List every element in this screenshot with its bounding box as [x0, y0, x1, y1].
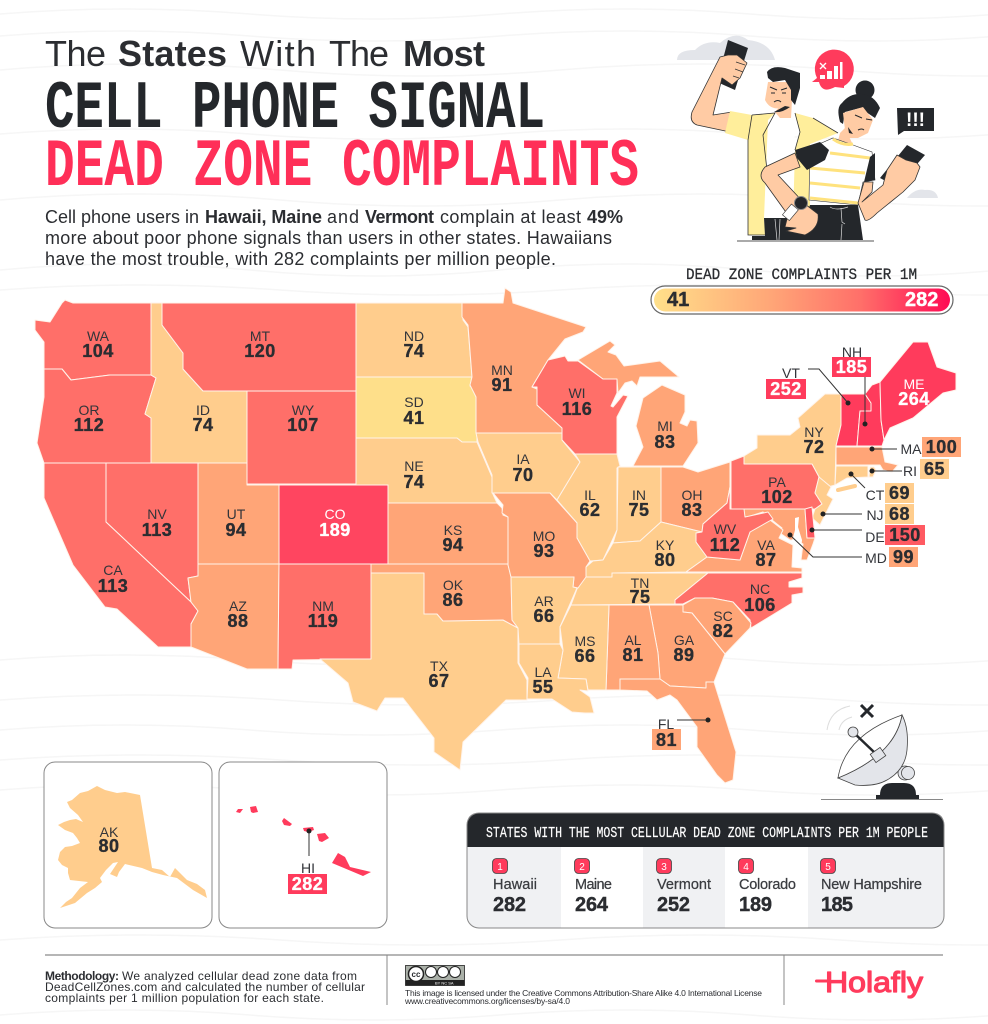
- state: NM: 119: [308, 611, 338, 631]
- state: CO: 189: [319, 520, 351, 540]
- state: AL: [606, 605, 660, 690]
- state: AR: AR: [534, 593, 554, 609]
- state: PA: PA: [768, 474, 786, 490]
- state: WA: [35, 300, 151, 380]
- state: UT: UT: [227, 506, 246, 522]
- title: [45, 33, 639, 206]
- state: CA: CA: [103, 562, 123, 578]
- state: NE: 74: [403, 472, 425, 492]
- callout: MD: [788, 532, 918, 567]
- callout: NH: NH: [842, 344, 862, 360]
- state: NE: [356, 438, 497, 503]
- state: SC: 82: [712, 621, 734, 641]
- callout: DE: 150: [889, 525, 921, 545]
- callout: FL: FL: [658, 716, 674, 732]
- state: MO: [493, 493, 590, 588]
- panel: Alaska inset: 80: [98, 836, 120, 856]
- callout: RI: RI: [903, 463, 917, 479]
- state: WI: 116: [562, 399, 592, 419]
- state: NC: NC: [750, 581, 770, 597]
- state: MS: [558, 605, 609, 690]
- state: FL: [620, 679, 736, 783]
- state: DE: [805, 507, 815, 538]
- state: WY: [247, 391, 356, 484]
- license text: This image is licensed under the Creative Commons Attribution-Share Alike 4.0 International License: [405, 988, 762, 998]
- state: PA: [731, 456, 822, 509]
- state: WV: 112: [710, 535, 740, 555]
- rank 1: Hawaii: 1: [497, 862, 503, 873]
- state: WY: 107: [287, 415, 319, 435]
- state: ID: 74: [192, 415, 214, 435]
- state: LA: LA: [534, 664, 552, 680]
- state: TN: TN: [631, 575, 649, 591]
- panel: Hawaii inset: [219, 762, 387, 928]
- state: NC: [675, 573, 803, 628]
- panel: Alaska inset: AK: [100, 824, 119, 840]
- rank 4: Colorado: [738, 858, 796, 916]
- rank 2: Maine: Maine: [575, 877, 612, 893]
- panel: Hawaii inset: HI: [301, 860, 315, 876]
- state: MI: [578, 341, 698, 466]
- state: SC: [683, 598, 751, 654]
- state: VA: [686, 520, 802, 572]
- callout: CT: CT: [866, 487, 885, 503]
- license text: www.creativecommons.org/licenses/by-sa/4.0: [404, 996, 570, 1006]
- state: OH: 83: [681, 500, 703, 520]
- state: NH: [857, 382, 884, 446]
- state: MI: MI: [657, 418, 673, 434]
- state: KS: [388, 503, 508, 564]
- state: MN: 91: [491, 375, 513, 395]
- callout: NJ: [820, 504, 914, 524]
- state: OR: 112: [74, 415, 104, 435]
- state: MT: [162, 303, 356, 391]
- icon: exclamation speech bubble: !!!: [906, 110, 925, 131]
- legend: complaints colour scale: 41: [667, 289, 689, 311]
- state: ME: 264: [898, 389, 930, 409]
- state: KY: 80: [654, 550, 676, 570]
- icon: clouds: [677, 36, 938, 198]
- methodology note: [45, 969, 365, 1005]
- state: MD: [744, 509, 815, 560]
- panel: top five states table: [467, 813, 944, 928]
- state: MT: MT: [250, 328, 271, 344]
- state: TN: 75: [629, 587, 651, 607]
- rank 4: Colorado: Colorado: [739, 877, 796, 893]
- rank 3: Vermont: Vermont: [657, 877, 711, 893]
- state: IA: 70: [512, 465, 534, 485]
- table header: [467, 813, 944, 847]
- state: VA: 87: [755, 550, 777, 570]
- callout: MA: 100: [926, 437, 957, 457]
- illustration: frustrated phone users: [677, 36, 938, 241]
- icon: no signal speech bubble: [812, 50, 854, 90]
- state: TX: 67: [428, 671, 450, 691]
- state: GA: 89: [673, 645, 695, 665]
- rank 3: Vermont: 252: [657, 894, 690, 916]
- rank 2: Maine: [574, 858, 612, 916]
- callout: RI: [870, 459, 949, 479]
- state: UT: [198, 463, 279, 564]
- callout: NH: [832, 344, 871, 426]
- state: SD: [356, 377, 477, 442]
- state: WI: WI: [568, 385, 586, 401]
- rank 3: Vermont: [656, 858, 711, 916]
- state: Long Island (NY): [838, 486, 855, 490]
- state: IN: [613, 467, 661, 543]
- rank 1: Hawaii: [492, 858, 537, 916]
- state: AZ: AZ: [229, 598, 247, 614]
- state: TX: TX: [430, 658, 449, 674]
- callout: CT: 69: [889, 483, 910, 503]
- state: NY: [744, 394, 841, 487]
- state: CO: CO: [324, 506, 346, 522]
- intro paragraph: Vermont: [365, 207, 434, 227]
- callout: VT: [766, 365, 850, 406]
- state: IL: [557, 454, 620, 561]
- state: PA: 102: [761, 487, 793, 507]
- state: AZ: [188, 564, 279, 669]
- state: WI: [532, 356, 628, 454]
- state: SC: SC: [713, 608, 733, 624]
- state: NJ: [812, 477, 833, 525]
- intro paragraph: Hawaii, Maine: [205, 207, 322, 227]
- map: contiguous US choropleth: [35, 288, 956, 783]
- Holafly logo: Holafly: [825, 967, 924, 999]
- icon: satellite dish: [821, 705, 943, 800]
- state: TX: [320, 573, 527, 770]
- legend: complaints colour scale: [651, 266, 953, 314]
- state: CO: [279, 485, 388, 564]
- state: ID: ID: [196, 402, 210, 418]
- icon: creative commons badge: [406, 966, 464, 986]
- intro paragraph: more about poor phone signals than users in other states. Hawaiians: [45, 228, 612, 248]
- state: LA: 55: [532, 677, 554, 697]
- state: KS: 94: [442, 535, 464, 555]
- state: NV: 113: [142, 520, 172, 540]
- state: AZ: 88: [227, 611, 249, 631]
- state: CA: [44, 463, 198, 647]
- icon: creative commons badge: cc: [412, 970, 421, 979]
- state: MO: 93: [533, 541, 555, 561]
- intro paragraph: and: [327, 207, 359, 227]
- title: Most: [403, 33, 485, 74]
- rank 2: Maine: 264: [575, 894, 609, 916]
- state: SD: 41: [403, 408, 425, 428]
- state: OR: [37, 369, 156, 463]
- intro paragraph: have the most trouble, with 282 complaints per million people.: [45, 249, 556, 269]
- panel: Hawaii inset: 282: [292, 874, 323, 894]
- title: CELL PHONE SIGNAL: [45, 71, 545, 148]
- title: With: [240, 33, 316, 74]
- title: States: [118, 33, 227, 74]
- state: OH: OH: [682, 487, 702, 503]
- state: MS: MS: [574, 633, 596, 649]
- legend: complaints colour scale: 282: [905, 289, 938, 311]
- state: OH: [661, 462, 730, 532]
- state: MA: [836, 447, 898, 472]
- callout: VT: 252: [770, 379, 802, 399]
- rank 2: Maine: 2: [579, 862, 585, 873]
- callout: FL: 81: [656, 730, 677, 750]
- rank 1: Hawaii: 282: [493, 894, 526, 916]
- icon: creative commons badge: BY NC SA: [435, 980, 454, 986]
- state: AR: [511, 577, 577, 644]
- state: CT: [835, 466, 868, 485]
- state: NM: [278, 564, 371, 669]
- intro paragraph: Cell phone users in: [45, 207, 199, 227]
- title: The: [329, 33, 389, 74]
- state: AR: 66: [533, 606, 555, 626]
- state: WY: WY: [292, 402, 315, 418]
- state: GA: [649, 605, 725, 688]
- state: MT: 120: [244, 341, 276, 361]
- state: KY: KY: [656, 537, 675, 553]
- icon: exclamation speech bubble: [897, 108, 934, 135]
- title: The: [45, 33, 106, 74]
- state: AL: 81: [622, 645, 644, 665]
- state: IN: 75: [628, 500, 650, 520]
- state: OK: OK: [443, 577, 464, 593]
- rank 5: New Hampshire: 5: [825, 862, 831, 873]
- state: OK: [371, 564, 518, 628]
- state: TN: [571, 573, 708, 607]
- state: ND: ND: [404, 328, 424, 344]
- state: IL: 62: [579, 500, 601, 520]
- state: NV: [106, 463, 198, 602]
- callout: DE: DE: [865, 529, 885, 545]
- state: WA: WA: [87, 328, 110, 344]
- methodology note: Methodology:: [45, 969, 119, 983]
- state: OR: OR: [78, 402, 100, 418]
- state: NE: NE: [404, 458, 424, 474]
- intro paragraph: 49%: [587, 207, 623, 227]
- state: VA: VA: [757, 537, 775, 553]
- icon: man: [691, 40, 838, 240]
- intro paragraph: [45, 207, 623, 269]
- state: MO: MO: [533, 528, 555, 544]
- state: MN: MN: [491, 362, 513, 378]
- panel: Alaska inset: [44, 762, 212, 928]
- state: MI: 83: [654, 432, 676, 452]
- callout: MA: [870, 437, 961, 457]
- state: MS: 66: [574, 646, 596, 666]
- state: ME: [880, 342, 956, 440]
- state: KS: KS: [444, 522, 462, 538]
- callout: DE: [810, 525, 925, 545]
- methodology note: complaints per 1 million population for each state.: [45, 991, 324, 1005]
- state: OK: 86: [442, 590, 464, 610]
- callout: FL: [652, 716, 710, 750]
- state: WA: 104: [82, 341, 114, 361]
- state: NC: 106: [744, 595, 776, 615]
- rank 4: Colorado: 4: [743, 862, 749, 873]
- callout: NJ: NJ: [866, 507, 884, 523]
- license text: [404, 988, 762, 1006]
- state: UT: 94: [225, 520, 247, 540]
- legend: complaints colour scale: DEAD ZONE COMPLAINTS PER 1M: [686, 266, 917, 284]
- state: IL: IL: [584, 487, 596, 503]
- rank 1: Hawaii: Hawaii: [493, 877, 537, 893]
- state: LA: [519, 644, 594, 713]
- state: NV: NV: [147, 506, 167, 522]
- callout: RI: 65: [924, 459, 945, 479]
- callout: VT: VT: [782, 365, 800, 381]
- state: VT: [836, 394, 871, 446]
- state: KY: [586, 522, 707, 577]
- state: NM: NM: [312, 598, 334, 614]
- state: WV: [696, 487, 773, 560]
- state: WV: WV: [714, 521, 737, 537]
- state: IA: [476, 433, 580, 500]
- methodology note: We analyzed cellular dead zone data from: [122, 969, 357, 983]
- callout: MD: 99: [893, 547, 914, 567]
- rank 5: New Hampshire: 185: [821, 894, 853, 916]
- state: GA: GA: [674, 632, 695, 648]
- state: NY: NY: [804, 424, 824, 440]
- state: IA: IA: [516, 451, 530, 467]
- icon: woman: [761, 80, 925, 240]
- state: SD: SD: [404, 394, 424, 410]
- methodology note: DeadCellZones.com and calculated the number of cellular: [45, 980, 365, 994]
- callout: NH: 185: [836, 357, 867, 377]
- state: ME: ME: [904, 376, 924, 392]
- state: RI: [869, 467, 876, 477]
- intro paragraph: complain at least: [440, 207, 581, 227]
- rank 3: Vermont: 3: [661, 862, 667, 873]
- callout: MA: MA: [900, 441, 922, 457]
- state: ID: [145, 303, 247, 463]
- state: CA: 113: [98, 576, 128, 596]
- Chesapeake Bay: [791, 517, 802, 565]
- rank 5: New Hampshire: New Hampshire: [821, 877, 922, 893]
- callout: NJ: 68: [889, 504, 910, 524]
- state: IN: IN: [632, 487, 646, 503]
- state: ND: [356, 303, 472, 377]
- callout: CT: [848, 472, 914, 503]
- title: DEAD ZONE COMPLAINTS: [45, 129, 639, 206]
- rank 4: Colorado: 189: [739, 894, 772, 916]
- state: AL: AL: [624, 632, 642, 648]
- state: MN: [462, 288, 586, 433]
- table columns: [467, 847, 944, 928]
- rank 5: New Hampshire: [820, 858, 922, 916]
- callout: MD: MD: [865, 550, 887, 566]
- state: ND: 74: [403, 341, 425, 361]
- state: NY: 72: [803, 437, 825, 457]
